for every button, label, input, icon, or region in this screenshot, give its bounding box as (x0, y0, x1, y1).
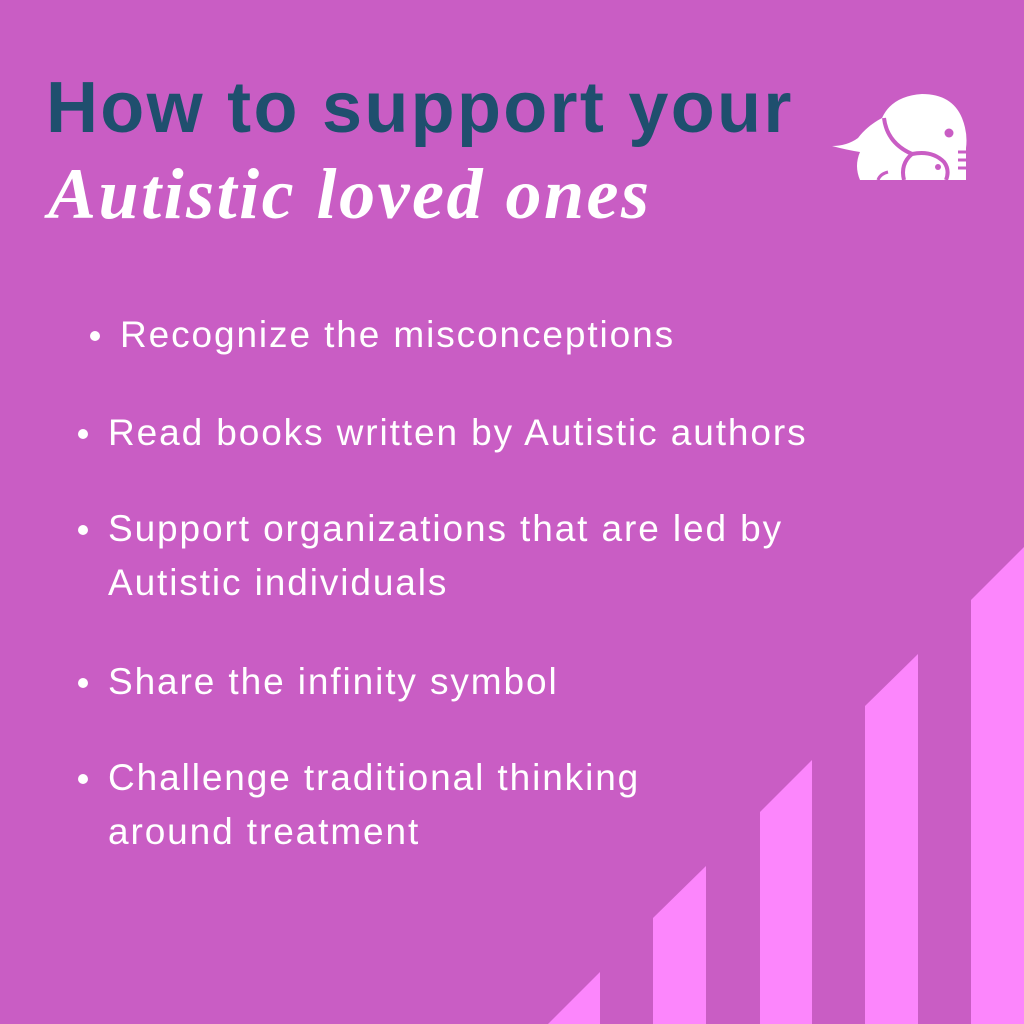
list item 5 (108, 751, 640, 859)
list item 2: Read books written by Autistic authors (108, 412, 807, 453)
list item 3: Support organizations that are led by (108, 508, 783, 549)
subtitle: Autistic loved ones (48, 154, 652, 234)
list item 1: Recognize the misconceptions (120, 314, 675, 355)
list item 5: around treatment (108, 811, 420, 852)
title: How to support your (46, 68, 794, 148)
list item 3: Autistic individuals (108, 562, 448, 603)
list item 4: Share the infinity symbol (108, 661, 559, 702)
list item 3 (108, 502, 783, 610)
icon: elephant (832, 94, 966, 180)
list item 5: Challenge traditional thinking (108, 757, 640, 798)
